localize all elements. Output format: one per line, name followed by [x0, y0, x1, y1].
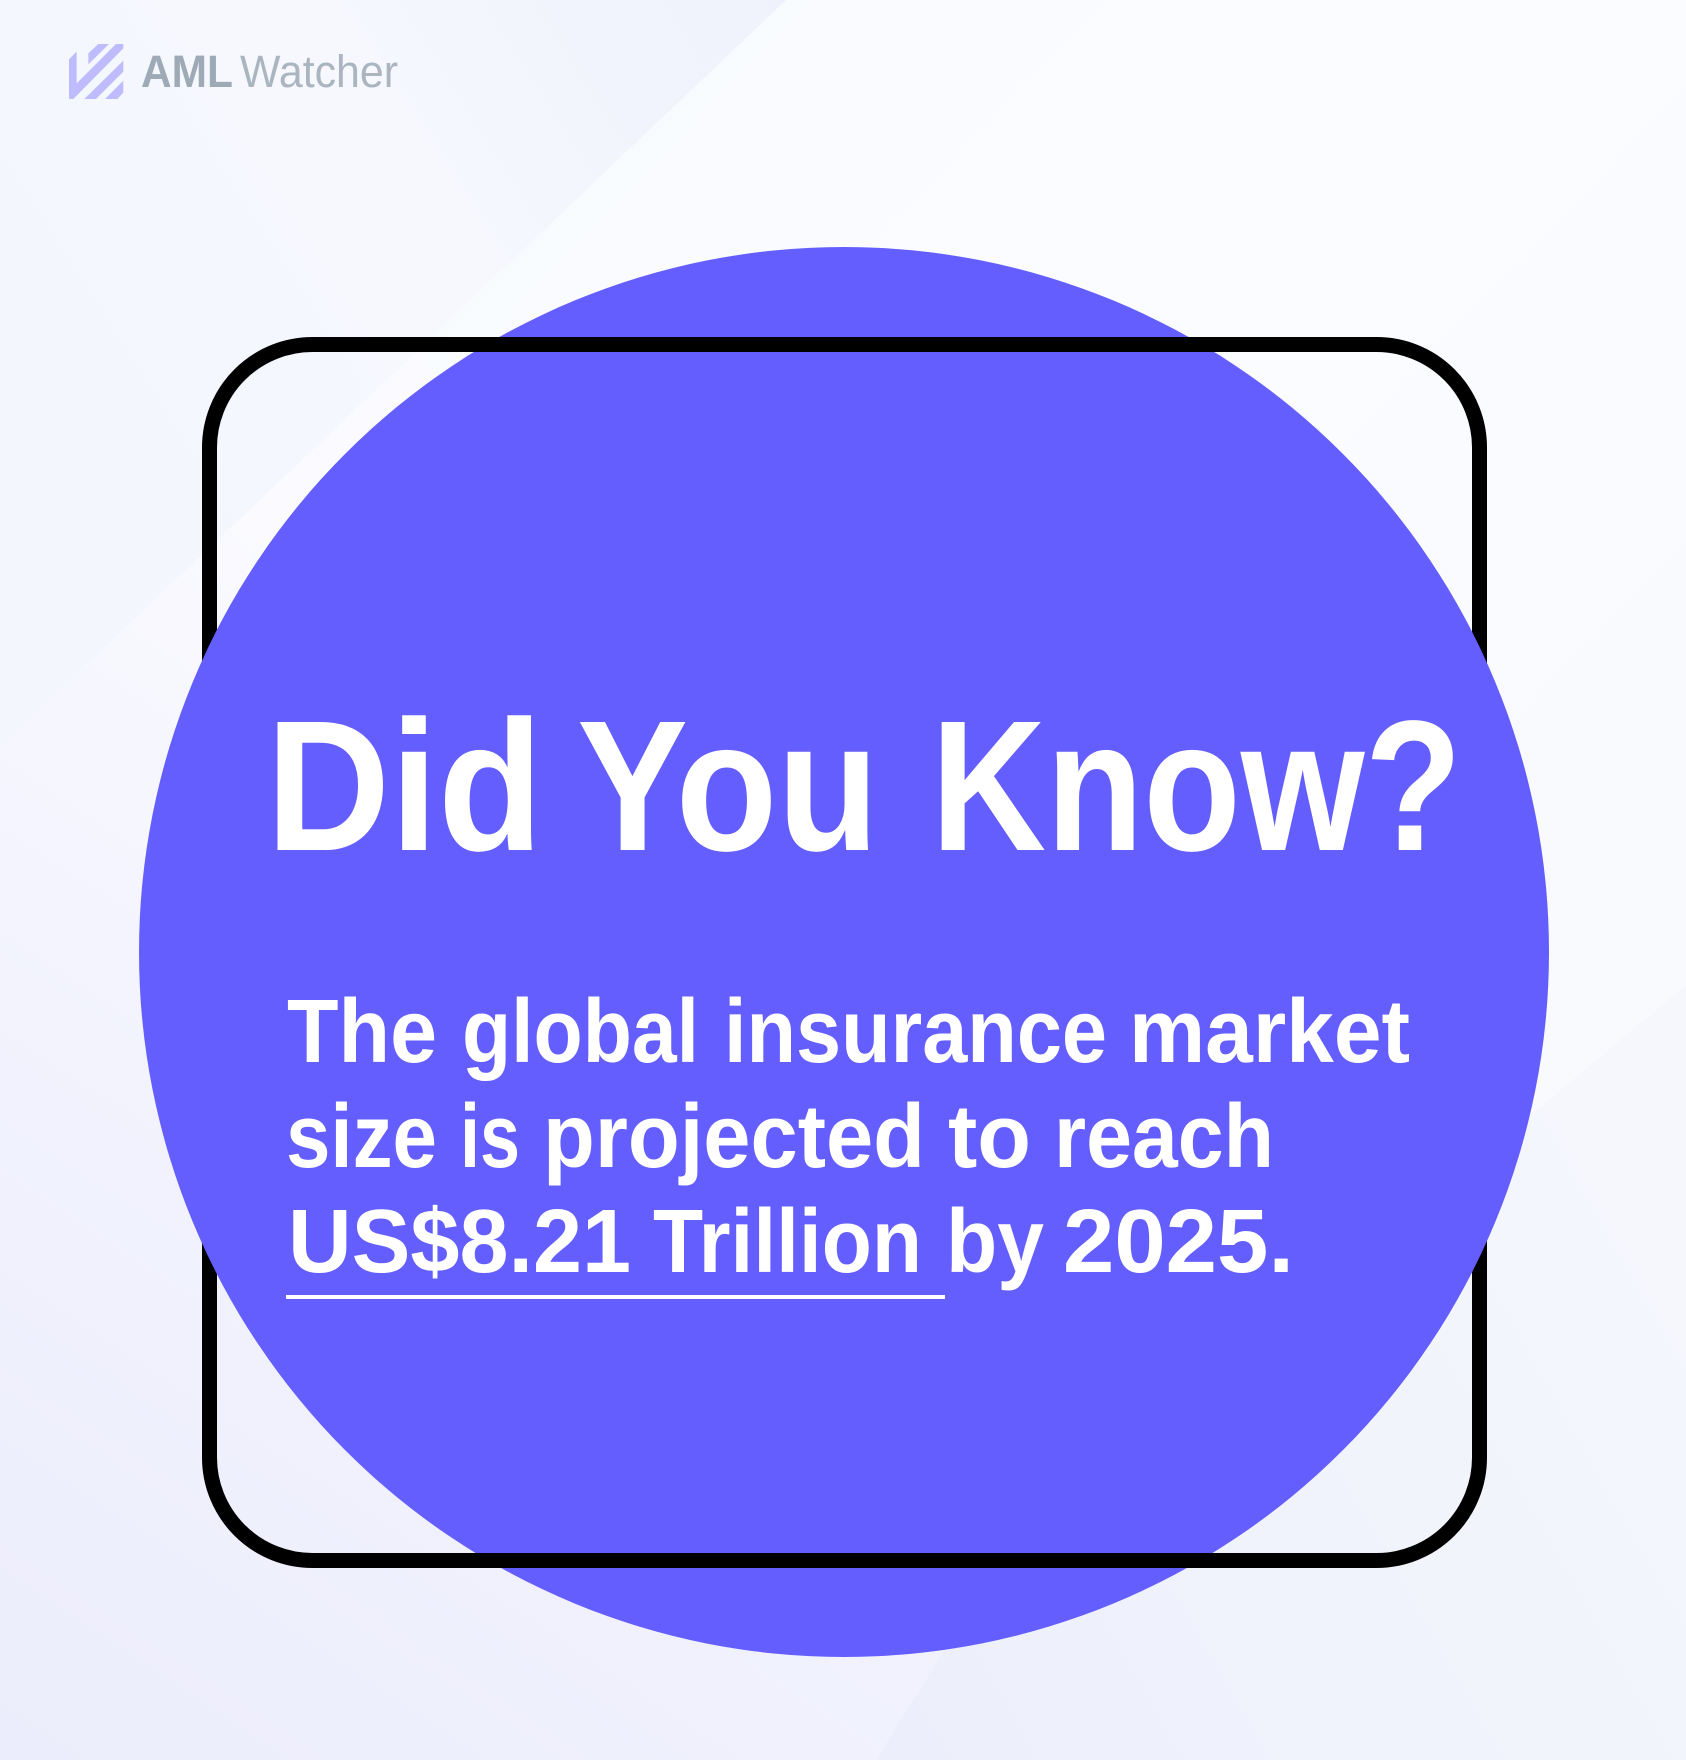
body text: [286, 982, 1410, 1292]
icon: logo mark: [69, 44, 123, 99]
line 2: to: [948, 1087, 1031, 1187]
title: [266, 683, 1462, 890]
line 2: is: [460, 1087, 520, 1187]
line 2: size: [286, 1087, 437, 1187]
line 3: Trillion: [653, 1192, 922, 1292]
logo wordmark: AML: [141, 46, 233, 97]
logo wordmark: Watcher: [240, 46, 398, 97]
line 3: US$8.21: [288, 1192, 631, 1292]
line 2: projected: [543, 1087, 925, 1187]
purple circle: [139, 247, 1549, 1657]
logo: AML Watcher: [69, 44, 398, 99]
logo wordmark: [141, 46, 398, 97]
line 3: [288, 1192, 1294, 1292]
frame bottom edge over circle: [312, 1553, 1376, 1568]
line 2: [286, 1087, 1274, 1187]
line 3: by: [946, 1192, 1044, 1292]
underline: [286, 1295, 945, 1299]
title: Did: [266, 683, 543, 890]
line 2: reach: [1054, 1087, 1274, 1187]
line 1: [287, 982, 1410, 1082]
line 3: 2025.: [1063, 1192, 1294, 1292]
rounded frame: [210, 344, 1480, 1560]
line 1: insurance: [724, 982, 1107, 1082]
title: Know?: [931, 683, 1462, 890]
line 1: market: [1129, 982, 1410, 1082]
title: You: [577, 683, 879, 890]
line 1: global: [462, 982, 699, 1082]
line 1: The: [287, 982, 437, 1082]
frame top edge over circle: [312, 337, 1376, 352]
